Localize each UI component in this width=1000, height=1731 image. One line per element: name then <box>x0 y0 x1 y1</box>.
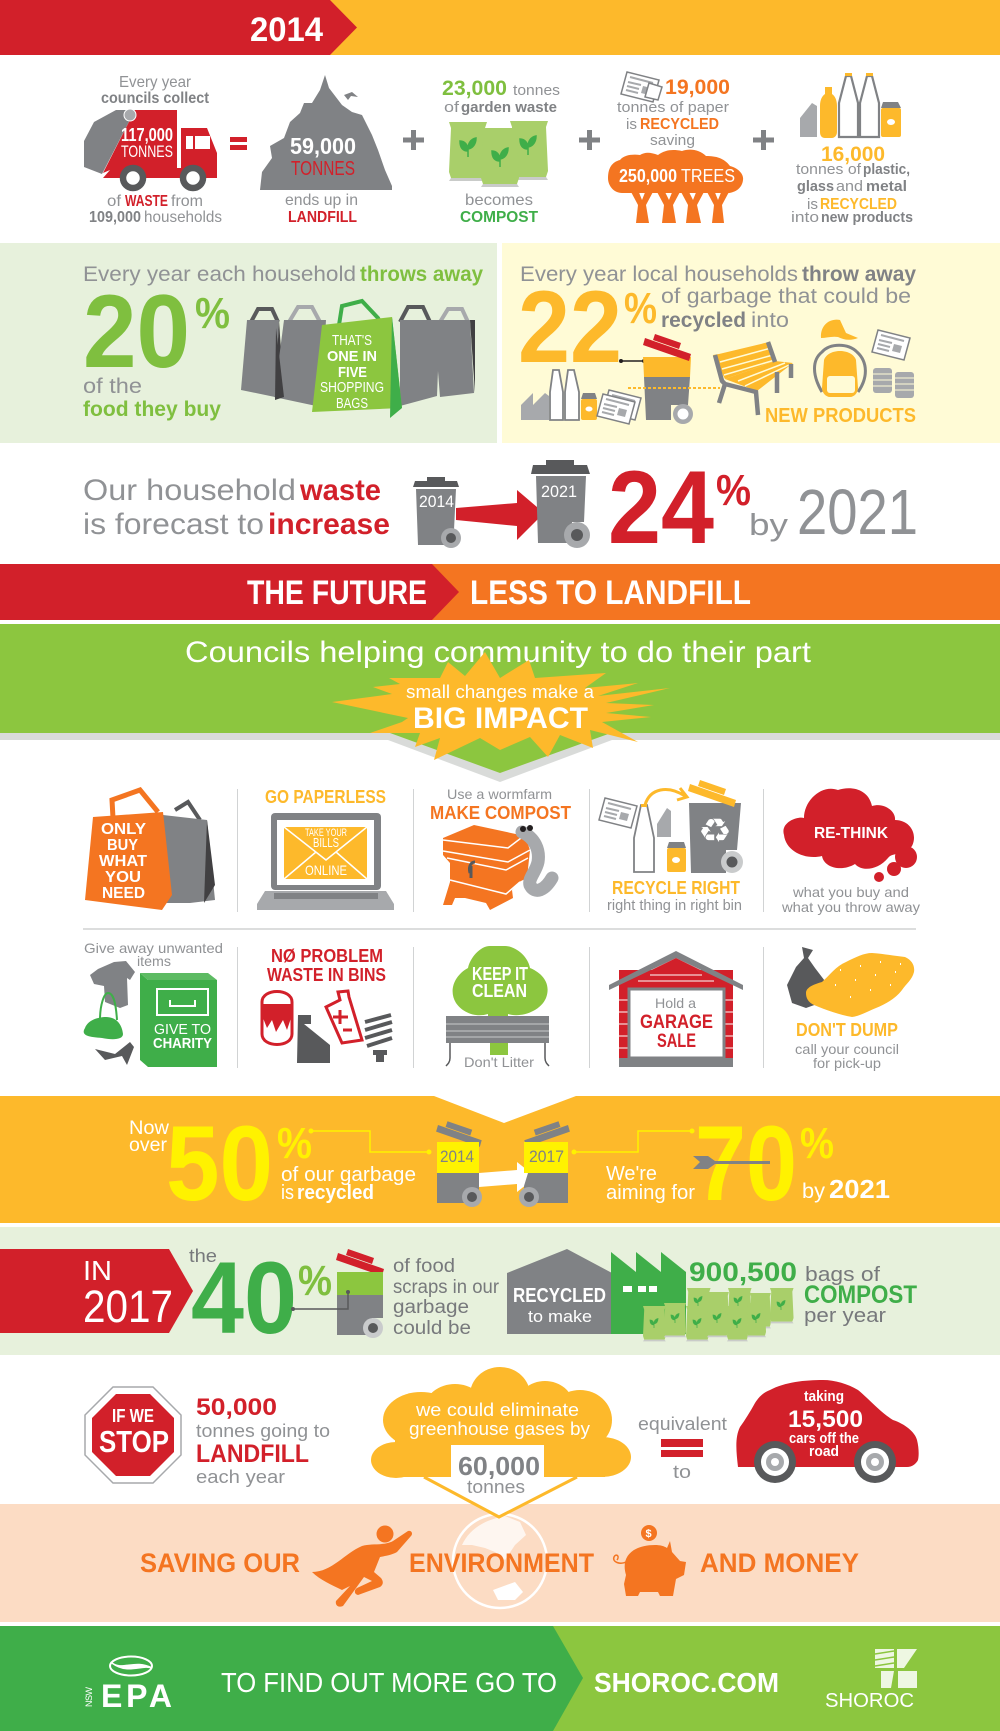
arrow: target dart <box>693 1156 770 1169</box>
tip: only buy what you need: NEED <box>102 885 145 902</box>
callout: greenhouse gas cloud: 60,000 <box>458 1451 540 1481</box>
tip: go paperless <box>257 787 394 910</box>
arrow: 2014 to 2017 <box>479 1162 536 1192</box>
icon: stop sign <box>85 1387 181 1483</box>
tip: give to charity: items <box>137 953 171 969</box>
tip: give to charity: CHARITY <box>153 1035 212 1052</box>
equivalent to: equivalent <box>638 1414 727 1434</box>
stat: plastic, glass and metal: RECYCLED <box>820 196 897 213</box>
panel: recycling targets: aiming for <box>606 1182 695 1204</box>
panel: recycling targets: 2021 <box>829 1174 890 1204</box>
panel: recycling targets: We're <box>606 1163 657 1185</box>
panel: recycling targets: over <box>129 1135 168 1156</box>
stat: garden waste compost: garden waste <box>461 99 557 116</box>
stat: garden waste compost <box>442 77 560 226</box>
stat: councils collect 117,000 tonnes: councils collect <box>101 90 210 107</box>
stat: household waste forecast: 24 <box>608 450 714 566</box>
panel: food thrown away: of the <box>83 375 142 398</box>
icon: shopping bags: FIVE <box>338 364 367 381</box>
logo: NSW EPA: EPA <box>101 1678 172 1714</box>
stat: household waste forecast: waste <box>299 474 381 507</box>
logo: SHOROC: SHOROC <box>825 1690 914 1712</box>
panel: in 2017 food scraps to compost: 2017 <box>83 1281 173 1332</box>
icon: shopping bags: THAT'S <box>332 332 372 349</box>
tip: keep it clean <box>446 946 549 1070</box>
icon: car with 15,500 <box>736 1380 919 1483</box>
panel: recycling targets: is <box>281 1182 294 1204</box>
icon: globe <box>453 1514 547 1608</box>
panel: recyclable garbage: into <box>751 309 789 332</box>
icon: stop sign: IF WE <box>112 1406 154 1426</box>
dividers <box>238 789 764 1068</box>
stat: recycled paper saves trees <box>608 72 743 223</box>
icon: shopping bags: BAGS <box>336 395 368 412</box>
tip: go paperless: ONLINE <box>305 862 347 878</box>
stat: if we stop: tonnes going to <box>196 1421 330 1441</box>
stat: recycled paper saves trees: saving <box>650 132 695 149</box>
stat: plastic, glass and metal: and <box>836 178 863 195</box>
tip: make compost with a wormfarm: MAKE COMPOST <box>430 803 571 823</box>
tip: only buy what you need <box>85 790 215 910</box>
icon: recycling facility: to make <box>528 1307 592 1326</box>
equals sign <box>230 137 247 150</box>
plus sign <box>579 130 600 150</box>
tip: recycle right: RECYCLE RIGHT <box>612 878 740 898</box>
tip: go paperless: GO PAPERLESS <box>265 787 386 807</box>
panel: recycling targets: by <box>802 1180 826 1203</box>
panel: in 2017 food scraps to compost: scraps in our <box>393 1277 500 1298</box>
icon: piggy bank: $ <box>646 1528 652 1540</box>
stat: landfill heap: ends up in <box>285 192 358 209</box>
banner: the future, less to landfill: THE FUTURE <box>247 574 427 612</box>
tip: make compost with a wormfarm: Use a wormfarm <box>447 786 552 802</box>
stat: recycled paper saves trees: tonnes of paper <box>617 99 729 116</box>
icon: recycled goods <box>814 320 914 398</box>
stat: if we stop: LANDFILL <box>196 1440 309 1468</box>
equivalent to: to <box>673 1462 691 1482</box>
panel: in 2017 food scraps to compost: of food <box>393 1256 455 1277</box>
stat: household waste forecast: by <box>749 507 789 542</box>
panel: recycling targets: Now <box>129 1118 169 1139</box>
tip: go paperless: TAKE YOUR <box>305 827 347 839</box>
panel: recycling targets: % <box>277 1119 312 1168</box>
tip: only buy what you need: BUY <box>107 837 138 854</box>
panel: saving our environment and money: AND MONEY <box>700 1548 859 1578</box>
icon: shopping bags <box>241 301 475 418</box>
panel: in 2017 food scraps to compost: % <box>298 1257 332 1305</box>
stat: garden waste compost: of <box>444 99 460 116</box>
panel: recycling targets: recycled <box>297 1182 374 1204</box>
icon: bottles and cans <box>800 73 901 138</box>
stat: councils collect 117,000 tonnes: of <box>107 193 122 210</box>
icon: superhero <box>312 1526 412 1607</box>
stat: if we stop: each year <box>196 1467 285 1487</box>
footer: TO FIND OUT MORE GO TO <box>221 1667 557 1698</box>
tip: keep it clean: CLEAN <box>472 981 527 1001</box>
icon: recycling facility <box>507 1249 686 1334</box>
panel: in 2017 food scraps to compost: COMPOST <box>804 1281 917 1309</box>
banner: the future, less to landfill <box>0 564 1000 620</box>
callout: greenhouse gas cloud <box>371 1367 631 1517</box>
icon: 2017 bin: 2017 <box>529 1147 564 1166</box>
stat: plastic, glass and metal: metal <box>866 178 907 195</box>
panel: food thrown away: 20 <box>83 274 190 390</box>
stat: recycled paper saves trees: is <box>626 116 637 133</box>
stat: landfill heap: TONNES <box>291 158 355 180</box>
stat: garden waste compost: COMPOST <box>460 209 538 226</box>
panel: in 2017 food scraps to compost: could be <box>393 1318 471 1339</box>
icon: compost bags <box>449 121 548 187</box>
icon: 2014 bin: 2014 <box>440 1147 474 1166</box>
stat: household waste forecast: is forecast to <box>83 508 264 541</box>
panel: recycling targets: of our garbage <box>281 1164 416 1186</box>
icon: recycled bench <box>713 342 793 415</box>
stat: recycled paper saves trees: RECYCLED <box>640 116 719 133</box>
panel: recyclable garbage: recycled <box>661 309 746 332</box>
panel: recyclable garbage <box>502 243 1000 443</box>
tip: no problem waste in bins <box>262 946 392 1063</box>
stat: landfill heap: 59,000 <box>290 133 356 159</box>
tip: no problem waste in bins: NØ PROBLEM <box>271 946 383 966</box>
equivalent to <box>638 1414 727 1482</box>
stat: councils collect 117,000 tonnes: WASTE <box>125 193 168 210</box>
tip: don't dump: call your council <box>795 1041 899 1057</box>
tip: garage sale: SALE <box>657 1031 696 1052</box>
icon: piggy bank <box>614 1525 686 1596</box>
logo: NSW EPA: NSW <box>84 1686 94 1707</box>
arrow: increase <box>456 490 544 540</box>
stat: landfill heap: LANDFILL <box>288 209 357 226</box>
stat: plastic, glass and metal <box>791 73 913 226</box>
panel: food thrown away: % <box>195 289 230 338</box>
icon: 2021 bin: 2021 <box>541 482 577 501</box>
plus sign <box>753 130 774 150</box>
stat: garden waste compost: tonnes <box>513 82 560 99</box>
icon: car with 15,500: 15,500 <box>788 1406 863 1433</box>
panel: in 2017 food scraps to compost <box>0 1227 1000 1355</box>
tip: re-think: what you buy and <box>792 884 909 900</box>
tip: recycle right <box>599 780 743 914</box>
stat: household waste forecast <box>83 450 918 566</box>
tip: don't dump: DON'T DUMP <box>796 1020 898 1040</box>
icon: car with 15,500: taking <box>804 1388 844 1405</box>
icon: recycling facility: RECYCLED <box>513 1285 606 1307</box>
icon: garbage truck: TONNES <box>121 142 173 161</box>
tip: re-think <box>781 788 920 915</box>
icon: recyclable items <box>521 370 641 424</box>
panel: in 2017 food scraps to compost: IN <box>83 1255 112 1286</box>
panel: recyclable garbage: % <box>624 284 657 333</box>
icon: car with 15,500: road <box>809 1443 839 1460</box>
stat: plastic, glass and metal: is <box>807 196 818 213</box>
panel: food thrown away: Every year each household <box>83 263 356 286</box>
panel: recyclable garbage: 22 <box>518 270 622 384</box>
stat: garden waste compost: 23,000 <box>442 77 507 100</box>
tip: only buy what you need: WHAT <box>99 853 147 870</box>
panel: saving our environment and money: SAVING OUR <box>140 1548 300 1578</box>
plus sign <box>403 130 424 150</box>
stat: plastic, glass and metal: 16,000 <box>821 143 885 166</box>
stat: recycled paper saves trees: 19,000 <box>665 76 730 99</box>
tip: give to charity: GIVE TO <box>154 1021 211 1038</box>
burst: big impact: small changes make a <box>406 682 595 702</box>
tip: garage sale: GARAGE <box>640 1012 713 1033</box>
panel: recyclable garbage: NEW PRODUCTS <box>765 405 916 427</box>
tip: don't dump: for pick-up <box>813 1055 881 1071</box>
icon: car with 15,500: cars off the <box>789 1430 859 1447</box>
panel: in 2017 food scraps to compost: per year <box>804 1305 886 1327</box>
stat: landfill heap <box>260 75 392 226</box>
tip: re-think: RE-THINK <box>814 825 888 842</box>
tip: only buy what you need: ONLY <box>101 821 146 838</box>
stat: household waste forecast: increase <box>268 508 390 541</box>
tip: go paperless: BILLS <box>313 835 339 850</box>
icon: 2021 bin <box>531 460 590 548</box>
tip: give to charity <box>84 940 223 1067</box>
icon: garbage truck <box>84 109 217 188</box>
panel: saving our environment and money: ENVIRONMENT <box>409 1548 594 1578</box>
stat: household waste forecast: Our household <box>83 474 296 507</box>
tip: re-think: what you throw away <box>781 899 920 915</box>
stat: plastic, glass and metal: new products <box>821 209 913 226</box>
stat: councils collect 117,000 tonnes <box>84 74 222 226</box>
tip: garage sale <box>609 951 743 1067</box>
stat: plastic, glass and metal: into <box>791 209 819 226</box>
icon: waste bin with lid <box>619 334 720 424</box>
stat: if we stop: 50,000 <box>196 1394 277 1421</box>
panel: councils helping community <box>0 624 1000 782</box>
icon: 2014 bin: 2014 <box>419 492 454 511</box>
burst: big impact: BIG IMPACT <box>413 702 588 735</box>
panel: recyclable garbage: Every year local households <box>520 263 798 286</box>
callout: greenhouse gas cloud: we could eliminate <box>415 1400 579 1420</box>
top banner: 2014: 2014 <box>250 11 323 49</box>
tip: keep it clean: KEEP IT <box>472 964 528 984</box>
footer <box>0 1626 1000 1731</box>
tip: make compost with a wormfarm <box>430 786 571 910</box>
stat: household waste forecast: 2021 <box>797 476 918 548</box>
tip: only buy what you need: YOU <box>105 869 141 886</box>
panel: food thrown away <box>0 243 497 443</box>
panel: councils helping community: Councils helping community to do their part <box>185 636 812 669</box>
panel: recycling targets: 70 <box>695 1103 797 1223</box>
panel: in 2017 food scraps to compost: 900,500 <box>689 1257 797 1287</box>
icon: newspapers <box>621 72 662 102</box>
panel: food thrown away: throws away <box>360 263 483 286</box>
tip: no problem waste in bins: WASTE IN BINS <box>267 965 386 985</box>
panel: recycling targets: 50 <box>166 1103 273 1223</box>
panel: in 2017 food scraps to compost: the <box>189 1246 217 1266</box>
panel: in 2017 food scraps to compost: bags of <box>805 1264 881 1286</box>
footer: SHOROC.COM <box>594 1667 779 1698</box>
stat: garden waste compost: becomes <box>465 192 533 209</box>
tip: recycle right: right thing in right bin <box>607 897 742 914</box>
stat: councils collect 117,000 tonnes: households <box>144 209 222 226</box>
stat: councils collect 117,000 tonnes: from <box>171 193 203 210</box>
tip: recycle right: ♻ <box>698 811 732 850</box>
panel: recycling targets: % <box>800 1119 834 1168</box>
stat: councils collect 117,000 tonnes: 109,000 <box>89 209 141 226</box>
stat: if we stop <box>85 1387 330 1487</box>
icon: food scraps bin <box>291 1249 384 1338</box>
icon: stop sign: STOP <box>99 1424 169 1459</box>
stat: plastic, glass and metal: plastic, <box>863 161 910 178</box>
icon: 2014 bin <box>436 1121 482 1207</box>
stat: household waste forecast: % <box>716 466 751 515</box>
top banner: 2014 <box>0 0 1000 55</box>
tip: don't dump <box>787 947 914 1071</box>
logo: SHOROC <box>825 1649 917 1712</box>
logo: NSW EPA <box>84 1656 172 1714</box>
panel: saving our environment and money <box>0 1504 1000 1622</box>
stat: recycled paper saves trees: 250,000 <box>619 166 677 186</box>
tip: give to charity: Give away unwanted <box>84 940 223 956</box>
banner: the future, less to landfill: LESS TO LANDFILL <box>470 574 751 612</box>
panel: in 2017 food scraps to compost: garbage <box>393 1297 469 1318</box>
burst: big impact <box>332 652 670 760</box>
panel: recyclable garbage: throw away <box>802 263 916 286</box>
icon: 2014 bin <box>413 477 461 548</box>
stat: recycled paper saves trees: TREES <box>681 166 735 186</box>
panel: recycling targets <box>0 1096 1000 1223</box>
tip: garage sale: Hold a <box>655 995 696 1011</box>
icon: 2017 bin <box>519 1121 570 1207</box>
tip: keep it clean: Don't Litter <box>464 1054 534 1070</box>
panel: in 2017 food scraps to compost: 40 <box>191 1241 297 1355</box>
icon: garbage truck: 117,000 <box>121 125 173 145</box>
panel: recyclable garbage: of garbage that could be <box>661 285 911 308</box>
panel: food thrown away: food they buy <box>83 398 221 421</box>
icon: shopping bags: SHOPPING <box>320 379 384 396</box>
icon: trees <box>608 150 743 223</box>
icon: shopping bags: ONE IN <box>327 348 377 365</box>
icon: compost bags <box>643 1288 794 1341</box>
stat: plastic, glass and metal: glass <box>797 178 834 195</box>
callout: greenhouse gas cloud: greenhouse gases by <box>409 1419 590 1439</box>
stat: plastic, glass and metal: tonnes of <box>796 161 862 178</box>
callout: greenhouse gas cloud: tonnes <box>467 1477 525 1497</box>
stat: councils collect 117,000 tonnes: Every year <box>119 74 192 91</box>
